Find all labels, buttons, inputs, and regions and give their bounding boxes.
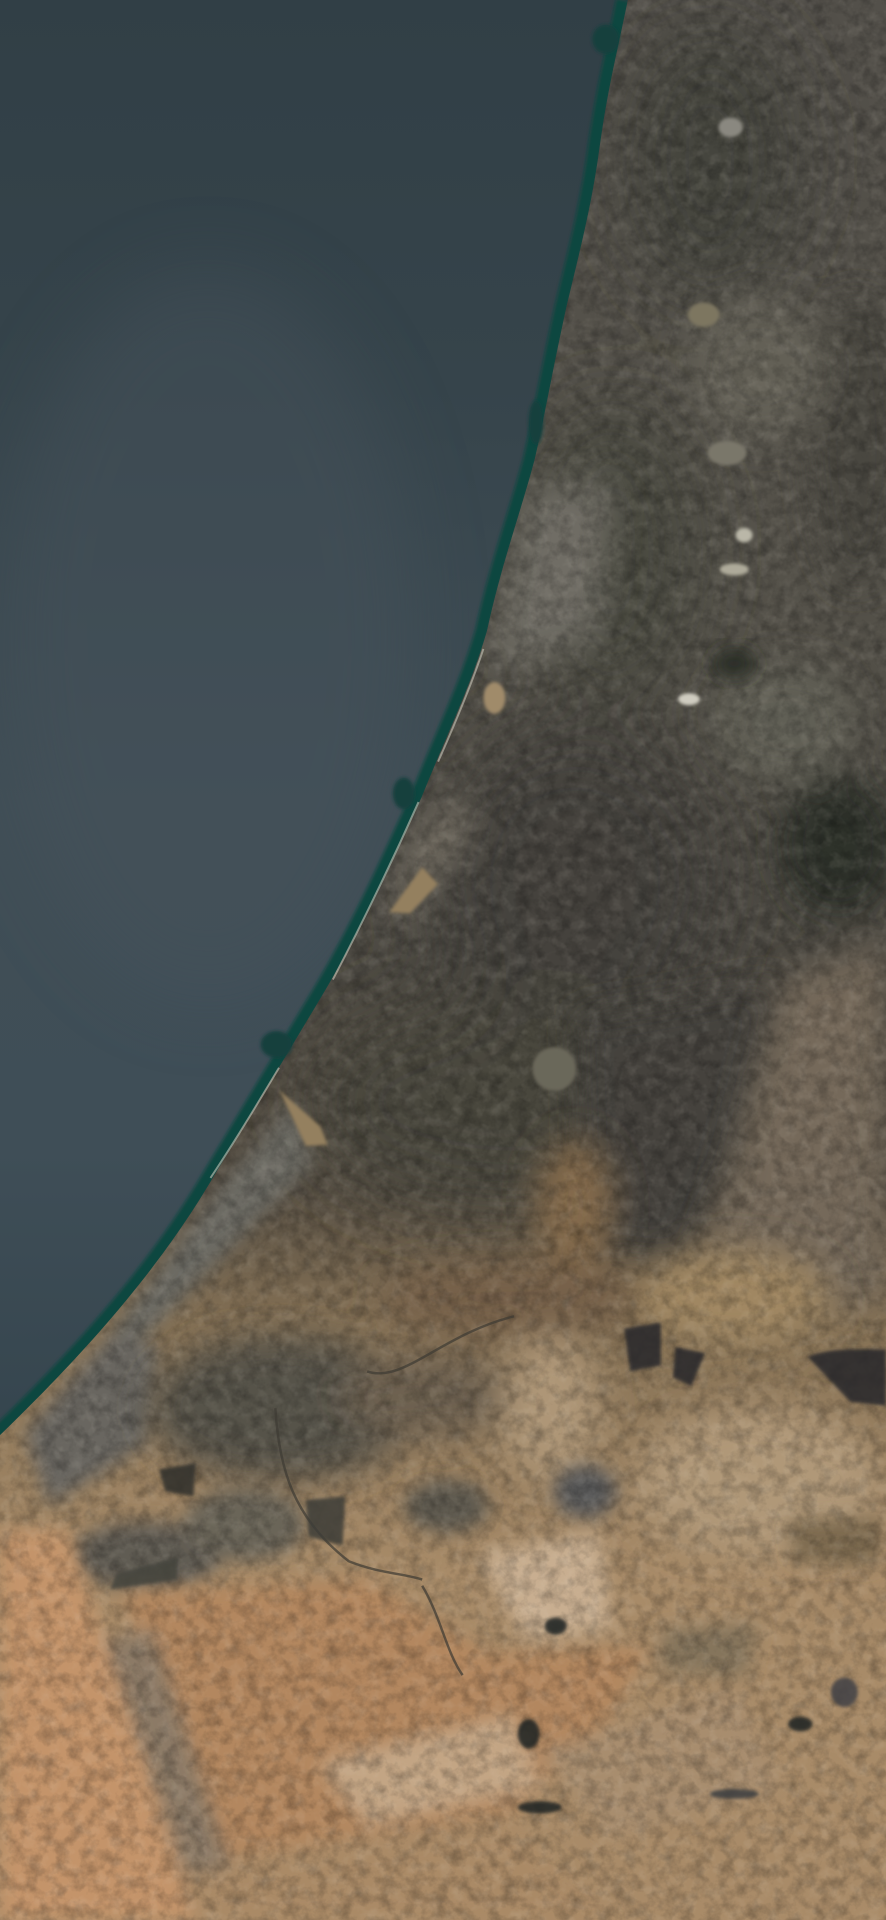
land: brown transition (147, 1139, 881, 1555)
land: dark forest (712, 648, 756, 680)
land: dark reservoirs and fields (110, 1322, 886, 1813)
land: coastal urban strip (392, 478, 612, 943)
land: dark central plain (306, 24, 795, 1212)
land: southern dark fields (71, 1464, 617, 1589)
land: southern orange desert (0, 1518, 881, 1920)
land: dry riverbeds (275, 1316, 514, 1675)
land: eastern hills (685, 294, 886, 1335)
land: bright patches (279, 118, 753, 1146)
coastal shallow band (0, 0, 623, 1435)
coastal water plumes (261, 24, 619, 1058)
land: dark inland patch (602, 1002, 756, 1267)
sea: lighter haze (0, 269, 416, 1004)
land: southern coastal strip (24, 1102, 312, 1506)
shoreline sand (210, 649, 483, 1178)
